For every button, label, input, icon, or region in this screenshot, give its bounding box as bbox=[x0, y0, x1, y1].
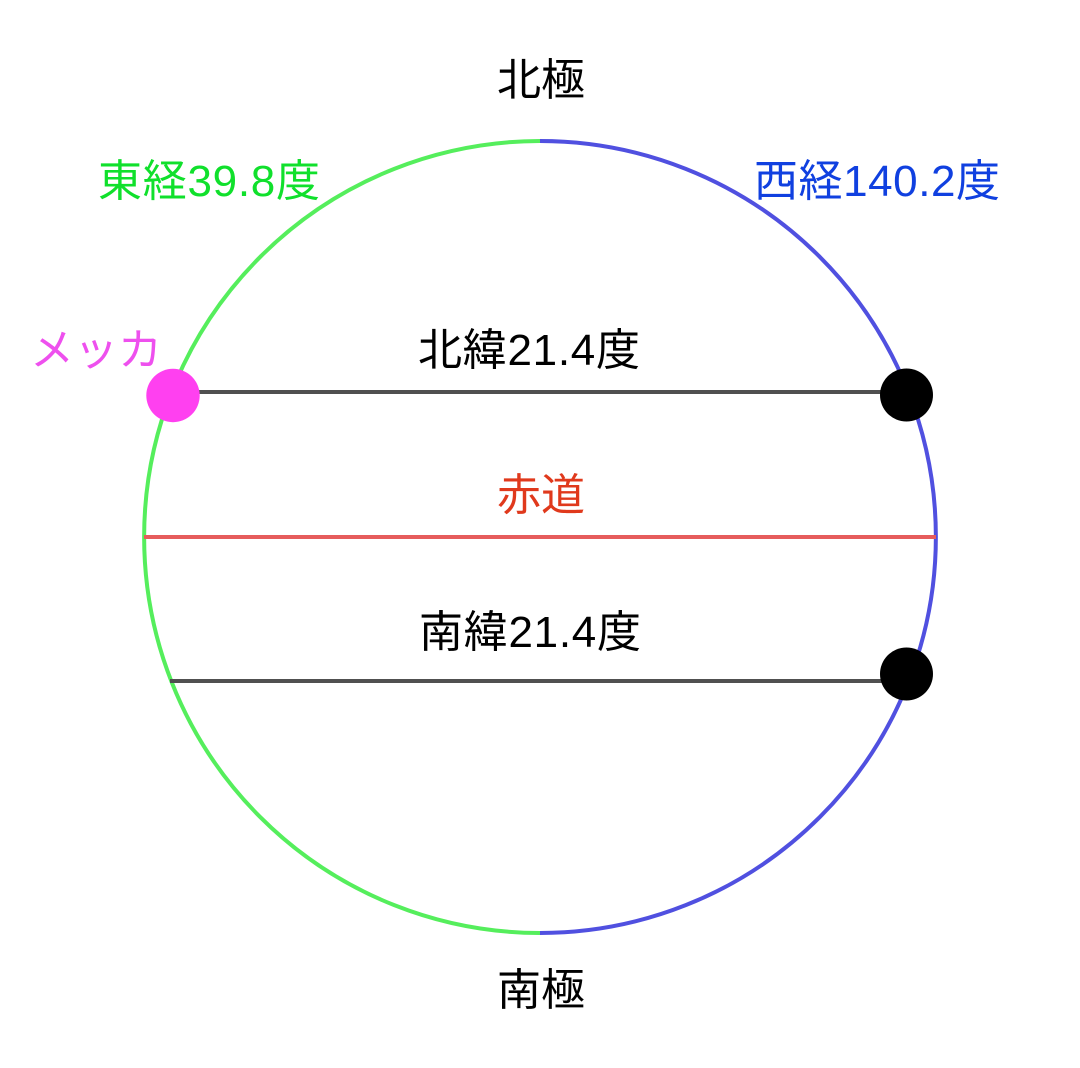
north latitude line bbox=[173, 390, 906, 394]
south latitude line bbox=[170, 679, 906, 683]
eastern hemisphere arc (green) bbox=[144, 141, 540, 933]
label: west longitude: 西経140.2度 bbox=[754, 157, 1000, 206]
Mecca marker bbox=[146, 369, 200, 422]
label: equator: 赤道 bbox=[497, 471, 585, 520]
equator line bbox=[144, 535, 936, 539]
label: south pole: 南極 bbox=[497, 966, 585, 1015]
label: north latitude: 北緯21.4度 bbox=[418, 326, 640, 375]
label: Mecca: メッカ bbox=[30, 326, 162, 375]
antipode north marker bbox=[880, 368, 933, 422]
label: east longitude: 東経39.8度 bbox=[98, 157, 320, 206]
western hemisphere arc (blue) bbox=[540, 141, 936, 933]
label: south latitude: 南緯21.4度 bbox=[419, 608, 641, 657]
label: north pole: 北極 bbox=[497, 56, 585, 105]
antipode south marker bbox=[880, 648, 933, 700]
